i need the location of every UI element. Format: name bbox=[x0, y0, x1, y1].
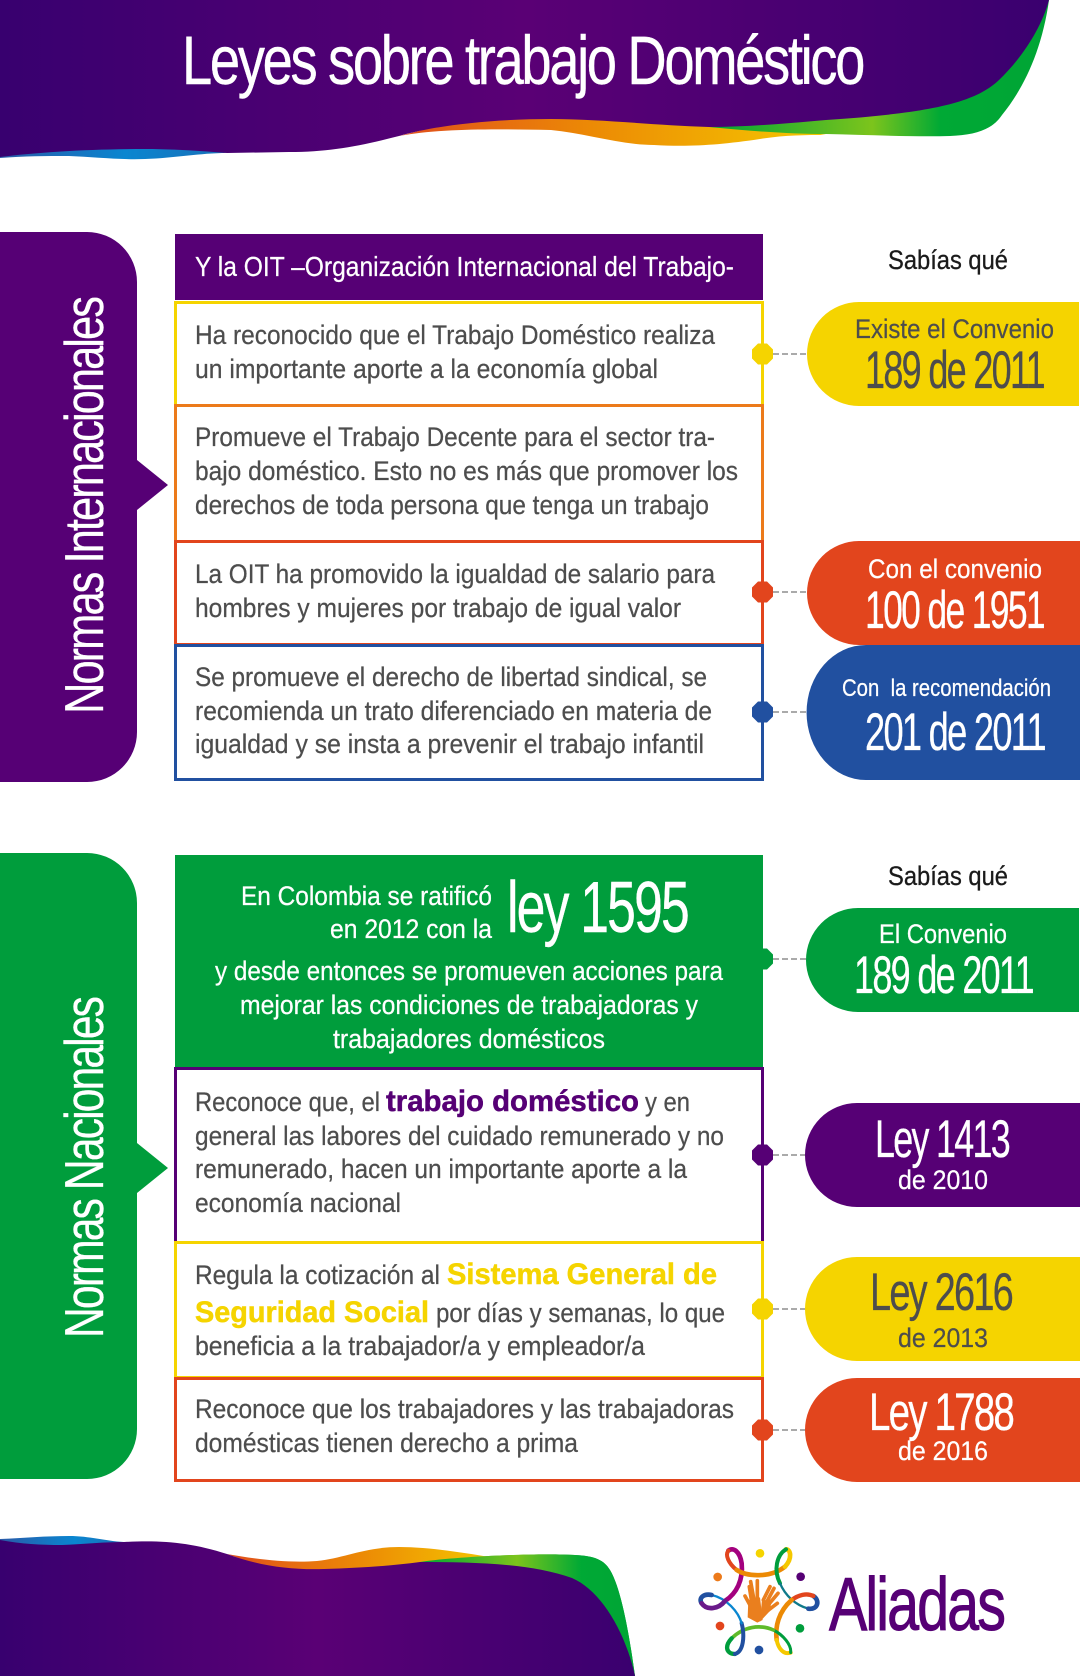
box: trabajo decente: Promueve el Trabajo Decente para el sector tra- bbox=[195, 422, 715, 452]
callout: ley 2616: de 2013 bbox=[898, 1323, 988, 1353]
callout: convenio 189: Existe el Convenio bbox=[855, 314, 1054, 344]
box: ley 2616 texto: beneficia a la trabajador/a y empleador/a bbox=[195, 1331, 646, 1361]
callout: ley 1788: Ley 1788 bbox=[869, 1383, 1014, 1442]
box: trabajo decente: derechos de toda persona que tenga un trabajo bbox=[195, 490, 709, 520]
box: igualdad de salario: hombres y mujeres por trabajo de igual valor bbox=[195, 593, 681, 623]
box: libertad sindical: Se promueve el derecho de libertad sindical, se bbox=[195, 662, 707, 692]
callout: el convenio 189: El Convenio bbox=[879, 919, 1007, 949]
heading: sabías qué nacional: Sabías qué bbox=[888, 861, 1008, 891]
box: aporte economía global: Ha reconocido que el Trabajo Doméstico realiza bbox=[195, 320, 716, 350]
box: ley 1413 texto: y en bbox=[645, 1087, 690, 1117]
box: aporte economía global bbox=[176, 302, 762, 406]
box: ley 2616 texto: Sistema General de bbox=[447, 1258, 717, 1291]
header bar OIT: Y la OIT –Organización Internacional del Trabajo- bbox=[195, 251, 734, 282]
callout: convenio 100 bbox=[752, 541, 1080, 645]
table: nacionales bbox=[175, 855, 763, 1480]
footer banner bbox=[0, 1536, 635, 1676]
green box ley 1595: en 2012 con la bbox=[330, 914, 493, 944]
box: trabajo decente: bajo doméstico. Esto no es más que promover los bbox=[195, 456, 738, 486]
header bar OIT bbox=[175, 234, 763, 300]
box: ley 1788 texto: domésticas tienen derecho a prima bbox=[195, 1428, 579, 1458]
box: libertad sindical: recomienda un trato diferenciado en materia de bbox=[195, 696, 712, 726]
box: igualdad de salario bbox=[176, 542, 762, 644]
callout: ley 2616 bbox=[752, 1257, 1080, 1361]
box: libertad sindical: igualdad y se insta a prevenir el trabajo infantil bbox=[195, 729, 704, 759]
box: ley 2616 texto: Regula la cotización al bbox=[195, 1260, 440, 1290]
label: normas nacionales: Normas Nacionales bbox=[53, 997, 115, 1338]
icon: ribbons, dots and gloves bbox=[701, 1549, 817, 1654]
box: trabajo decente bbox=[176, 406, 762, 542]
box: igualdad de salario: La OIT ha promovido la igualdad de salario para bbox=[195, 559, 716, 589]
callout: convenio 189 bbox=[752, 302, 1079, 406]
green box ley 1595: ley 1595 bbox=[507, 868, 688, 948]
label: normas internacionales: Normas Internacionales bbox=[53, 297, 115, 714]
callout: el convenio 189 bbox=[752, 908, 1079, 1012]
green box ley 1595: y desde entonces se promueven acciones para bbox=[215, 956, 724, 986]
callout: ley 1413: de 2010 bbox=[898, 1165, 988, 1195]
box: ley 1788 texto bbox=[176, 1378, 762, 1480]
callout: ley 2616: Ley 2616 bbox=[870, 1263, 1013, 1322]
callout: ley 1413: Ley 1413 bbox=[875, 1110, 1010, 1169]
box: ley 1413 texto: trabajo doméstico bbox=[386, 1085, 639, 1118]
box: aporte economía global: un importante aporte a la economía global bbox=[195, 354, 658, 384]
callout: convenio 100: Con el convenio bbox=[868, 554, 1042, 584]
box: ley 1413 texto: Reconoce que, el bbox=[195, 1087, 380, 1117]
box: ley 2616 texto: Seguridad Social bbox=[195, 1296, 429, 1329]
wordmark: Aliadas bbox=[829, 1562, 1004, 1646]
box: ley 1413 texto: remunerado, hacen un importante aporte a la bbox=[195, 1154, 688, 1184]
callout: recomendación 201 bbox=[752, 645, 1080, 780]
panel: normas nacionales bbox=[0, 853, 168, 1479]
box: ley 2616 texto: por días y semanas, lo que bbox=[436, 1298, 725, 1328]
heading: sabías qué internacional: Sabías qué bbox=[888, 245, 1008, 275]
box: ley 1788 texto: Reconoce que los trabajadores y las trabajadoras bbox=[195, 1394, 734, 1424]
green box ley 1595: trabajadores domésticos bbox=[333, 1024, 605, 1054]
table: internacionales bbox=[175, 234, 763, 780]
green box ley 1595 bbox=[175, 855, 763, 1067]
box: ley 2616 texto bbox=[176, 1242, 762, 1378]
callout: ley 1788 bbox=[752, 1378, 1080, 1482]
box: libertad sindical bbox=[176, 646, 762, 780]
box: ley 1413 texto: general las labores del cuidado remunerado y no bbox=[195, 1121, 724, 1151]
header banner bbox=[0, 0, 1049, 159]
green box ley 1595: mejorar las condiciones de trabajadoras y bbox=[240, 990, 698, 1020]
logo: Aliadas bbox=[701, 1549, 1004, 1654]
box: ley 1413 texto: economía nacional bbox=[195, 1188, 401, 1218]
title: Leyes sobre trabajo Doméstico bbox=[182, 22, 863, 99]
green box ley 1595: En Colombia se ratificó bbox=[241, 881, 492, 911]
panel: normas internacionales bbox=[0, 232, 168, 782]
callout: ley 1413 bbox=[752, 1103, 1080, 1207]
box: ley 1413 texto bbox=[176, 1068, 762, 1242]
callout: ley 1788: de 2016 bbox=[898, 1436, 988, 1466]
